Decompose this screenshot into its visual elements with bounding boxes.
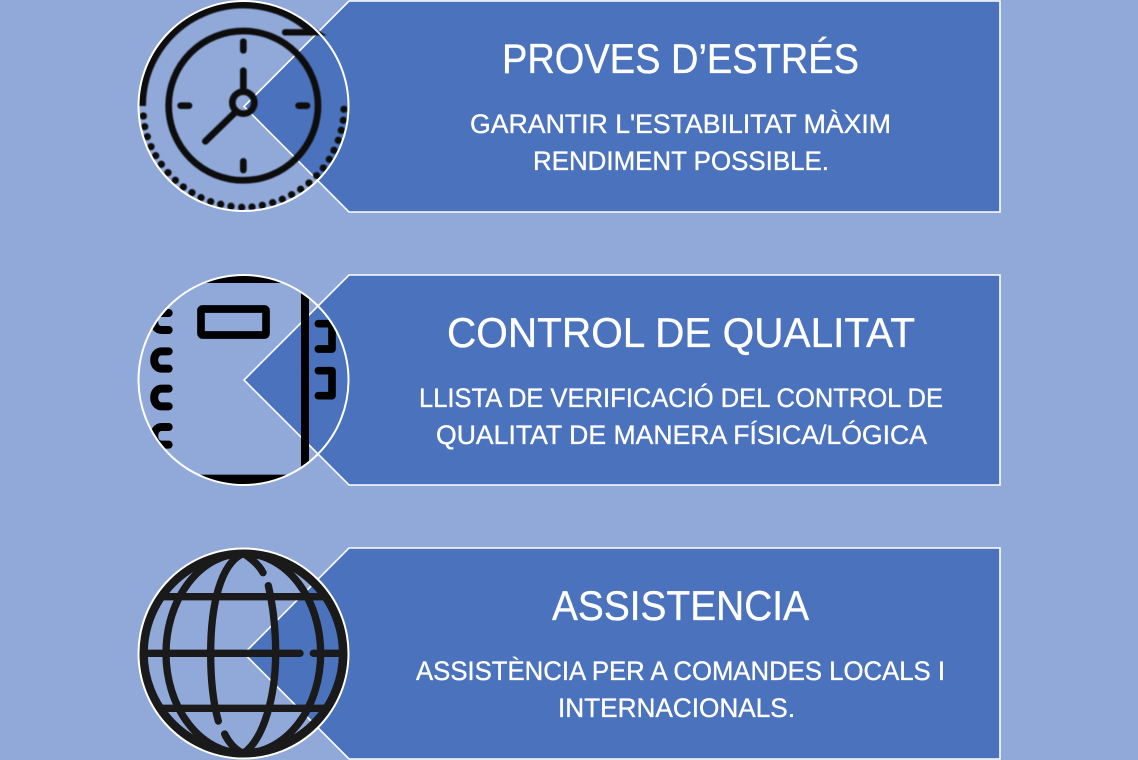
text block	[470, 109, 891, 176]
circle outline	[138, 275, 348, 485]
text block: QUALITAT DE MANERA FÍSICA/LÓGICA	[436, 419, 927, 450]
text block: GARANTIR L'ESTABILITAT MÀXIM	[470, 109, 891, 139]
banner shape	[244, 275, 1000, 485]
text block	[416, 656, 945, 723]
heading: ASSISTENCIA	[552, 582, 809, 629]
banner shape	[244, 548, 1000, 759]
text block: ASSISTÈNCIA PER A COMANDES LOCALS I	[416, 656, 945, 686]
panel: assistencia	[138, 548, 1000, 759]
circle outline	[138, 1, 348, 211]
banner shape	[244, 1, 1000, 212]
heading: CONTROL DE QUALITAT	[447, 309, 915, 356]
icon: notebook	[154, 268, 332, 488]
circle outline	[138, 548, 348, 758]
infographic	[138, 0, 1001, 760]
text block: LLISTA DE VERIFICACIÓ DEL CONTROL DE	[419, 382, 943, 413]
icon: clock	[140, 5, 348, 211]
panel: control de qualitat	[138, 268, 1000, 488]
panel: proves d'estrés	[138, 1, 1000, 212]
text block: INTERNACIONALS.	[558, 693, 795, 723]
text block: RENDIMENT POSSIBLE.	[533, 146, 829, 176]
text block	[419, 382, 943, 450]
icon: globe	[143, 553, 343, 753]
heading: PROVES D’ESTRÉS	[502, 35, 859, 82]
